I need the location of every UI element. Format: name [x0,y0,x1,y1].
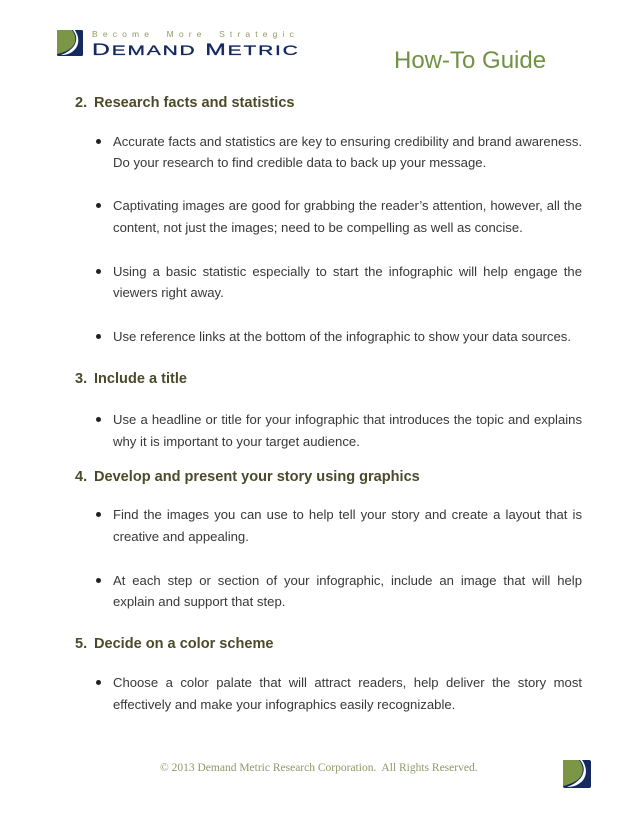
text block: color palate: effectively and make your infographics easily recognizable. [113,697,455,712]
heading: section 2: 2. [75,95,87,111]
text block: captivating images: Captivating images are good for grabbing the reader’s attention, however, all the [113,198,582,213]
bullet [96,269,101,274]
text block: captivating images [113,198,582,235]
text: Research facts and statistics [94,95,295,111]
heading: section 4 [75,469,420,485]
text block: basic statistic: Using a basic statistic especially to start the infographic will help engage the [113,264,582,279]
tagline: Become More Strategic [92,29,299,39]
heading: section 4: 4. [75,469,87,485]
title: How-To Guide: How-To Guide [394,47,546,74]
bullet [96,512,101,517]
text block: each step [113,573,582,609]
text block: find images [113,507,582,544]
icon: logo mark [57,30,83,56]
text block: accurate facts: Do your research to find credible data to back up your message. [113,155,486,170]
text block: basic statistic [113,264,582,300]
text block: find images: Find the images you can use to help tell your story and create a layout that is [113,507,582,522]
bullet [96,417,101,422]
heading: section 3: 3. [75,371,87,387]
heading: section 5 [75,636,273,652]
text: Develop and present your story using graphics [94,469,420,485]
wordmark: DEMAND METRIC [92,41,300,59]
text: Decide on a color scheme [94,636,273,652]
heading: section 5: 5. [75,636,87,652]
text block: color palate [113,675,582,712]
footer copyright: © 2013 Demand Metric Research Corporation. All Rights Reserved. [160,762,478,774]
bullet [96,334,101,339]
text block: captivating images: content, not just the images; need to be compelling as well as concise. [113,220,523,235]
icon: footer logo mark [563,760,591,788]
text block: find images: creative and appealing. [113,529,249,544]
text block: accurate facts: Accurate facts and statistics are key to ensuring credibility and brand awareness. [113,134,582,149]
logo: Demand Metric [57,29,300,59]
text block: headline: Use a headline or title for your infographic that introduces the topic and explains [113,412,582,427]
text block: accurate facts [113,134,582,170]
text block: reference links: Use reference links at the bottom of the infographic to show your data sources. [113,329,571,344]
text block: each step: At each step or section of your infographic, include an image that will help [113,573,582,588]
text block: color palate: Choose a color palate that will attract readers, help deliver the story most [113,675,582,690]
bullet [96,578,101,583]
text block: headline: why it is important to your target audience. [113,434,360,449]
bullet [96,680,101,685]
bullet [96,139,101,144]
bullet [96,203,101,208]
text block: basic statistic: viewers right away. [113,285,224,300]
text block: headline [113,412,582,449]
heading: section 3 [75,371,187,387]
text: Include a title [94,371,187,387]
text block: each step: explain and support that step. [113,594,285,609]
heading: section 2 [75,95,295,111]
